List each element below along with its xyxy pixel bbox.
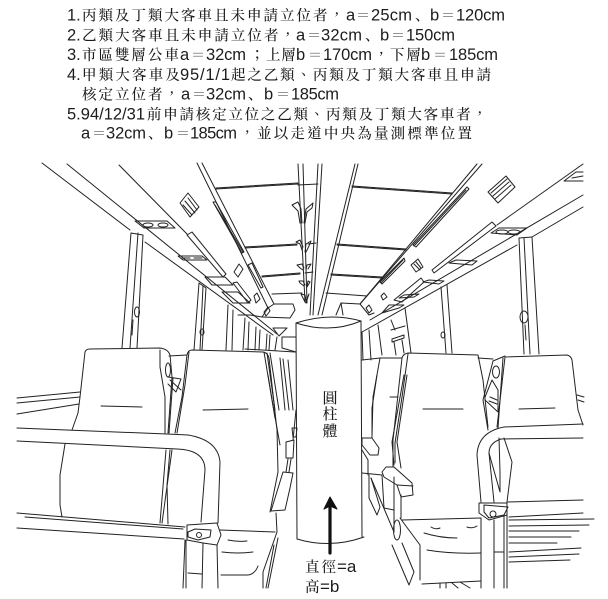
rule 2: ＝ xyxy=(391,26,405,46)
arrow pointing up to cylinder xyxy=(324,497,337,553)
rule 2: 150cm xyxy=(406,26,455,44)
rule 2: a xyxy=(296,26,306,44)
right seat cushion lines xyxy=(507,500,594,562)
rule 4 second line: 185cm xyxy=(291,86,339,104)
left rear seat xyxy=(17,348,181,517)
cylinder vertical label: 體 xyxy=(322,420,338,441)
rule 3: ＝ xyxy=(433,45,447,65)
rule 4 first line: 甲類大客車及 xyxy=(82,64,180,85)
rule 1: 、 xyxy=(415,4,430,26)
cylinder vertical label: 圓 xyxy=(322,387,338,408)
left window pillars xyxy=(122,233,296,410)
diameter and height label: =a xyxy=(337,557,357,576)
rule 3: ， xyxy=(374,44,388,65)
rule 5 second line: 32cm xyxy=(106,124,146,142)
bus interior illustration xyxy=(17,163,594,588)
diameter and height label: =b xyxy=(320,577,339,596)
rule 3: 上層 xyxy=(266,44,296,65)
rule 4 first line: 起之乙類、丙類及丁類大客車且申請 xyxy=(231,64,492,85)
rule 2: b xyxy=(380,26,389,44)
ceiling left beam xyxy=(197,163,295,318)
rule 3: ＝ xyxy=(191,45,205,65)
ceiling centre panels xyxy=(216,164,452,315)
left aisle armrest and buckle xyxy=(271,410,297,532)
rules text block xyxy=(67,4,505,144)
rule 3: 下層 xyxy=(390,44,421,65)
rule 2: 2. xyxy=(67,26,81,44)
right window seat xyxy=(483,355,584,430)
cylinder vertical label: 柱 xyxy=(322,403,338,424)
rule 5 second line: ＝ xyxy=(92,124,106,144)
rule 2: 乙類大客車且未申請立位者， xyxy=(82,24,295,46)
centre hand poles and straps xyxy=(292,164,313,303)
rule 1: 丙類及丁類大客車且未申請立位者， xyxy=(82,4,344,26)
diameter and height label xyxy=(305,556,357,597)
rule 5 second line: ＝ xyxy=(176,124,190,144)
rule 1: 120cm xyxy=(456,6,505,24)
rule 2: 、 xyxy=(365,24,380,46)
rule 5 first line: 5.94/12/31 xyxy=(67,106,145,124)
rule 3: ； xyxy=(250,44,264,65)
left seat cushion xyxy=(17,513,278,588)
rule 4 second line: ＝ xyxy=(192,84,206,104)
right window pillars xyxy=(362,237,539,360)
diameter and height label: 高 xyxy=(305,576,320,597)
rule 4 second line: b xyxy=(264,86,273,104)
rule 4 second line: ＝ xyxy=(276,84,290,104)
rule 5 second line: 185cm xyxy=(190,124,237,142)
rule 1: 25cm xyxy=(371,6,412,24)
rule 4 second line: 32cm xyxy=(206,86,246,104)
rule 4 second line: 、 xyxy=(248,84,262,104)
rule 4 first line: 4. xyxy=(67,66,81,84)
left seat grab rail xyxy=(17,428,221,588)
rule 3: 185cm xyxy=(449,46,498,64)
rule 5 second line: a xyxy=(81,124,91,142)
cylinder measuring body xyxy=(296,317,364,544)
rule 3: b xyxy=(421,46,430,64)
rule 4 second line: a xyxy=(181,86,191,104)
rule 4 second line: 核定立位者， xyxy=(82,84,179,104)
rule 5 second line: 並以走道中央為量測標準位置 xyxy=(257,122,472,144)
rule 3: a xyxy=(180,46,190,64)
seat-back lines to floor on aisle xyxy=(392,375,407,468)
rule 5 second line: ， xyxy=(240,122,254,144)
rule 1: a xyxy=(346,6,356,24)
rule 3: 170cm xyxy=(323,46,372,64)
right rear seat small armrest and strap xyxy=(362,358,402,515)
rule 3: 3. xyxy=(67,46,81,64)
ceiling right beam xyxy=(336,164,482,315)
rule 5 first line: 前申請核定立位之乙類、丙類及丁類大客車者， xyxy=(147,104,487,124)
rule 4 first line: 95/1/1 xyxy=(180,66,230,84)
left front seat xyxy=(160,350,280,524)
rule 3: 32cm xyxy=(206,46,246,64)
rule 5 second line: b xyxy=(164,124,173,142)
rule 3: 市區雙層公車 xyxy=(82,44,179,65)
rule 2: ＝ xyxy=(307,26,321,46)
diameter and height label: 直徑 xyxy=(305,556,336,577)
right seat grab rail xyxy=(477,424,583,588)
right aisle seat xyxy=(371,353,493,588)
rule 1: ＝ xyxy=(356,6,370,26)
rule 3: b xyxy=(296,46,305,64)
rule 1: 1. xyxy=(67,6,81,24)
rule 5 second line: 、 xyxy=(148,122,162,144)
cylinder vertical label xyxy=(322,387,338,441)
rule 1: b xyxy=(430,6,439,24)
rule 3: ＝ xyxy=(308,45,322,65)
ceiling right luggage rack xyxy=(362,164,583,332)
ceiling left luggage rack xyxy=(42,163,287,336)
rule 1: ＝ xyxy=(441,6,455,26)
rule 2: 32cm xyxy=(321,26,362,44)
